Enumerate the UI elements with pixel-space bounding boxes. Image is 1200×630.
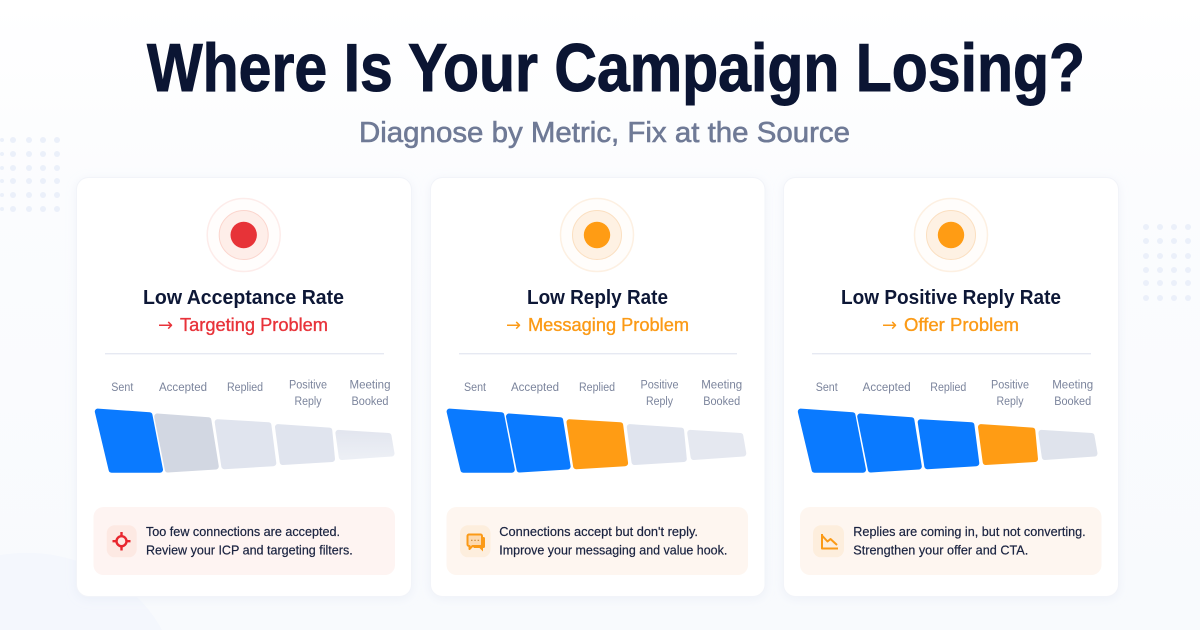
card heading: Low Positive Reply Rate xyxy=(841,287,1061,309)
funnel chart xyxy=(450,412,743,470)
diagnosis: targeting problem: → xyxy=(158,315,173,336)
callout text: Strengthen your offer and CTA. xyxy=(853,544,1028,558)
card heading: Low Acceptance Rate xyxy=(143,287,344,309)
funnel stage labels: Meeting xyxy=(350,380,390,392)
funnel stage labels: Accepted xyxy=(511,382,559,394)
callout: offer advice xyxy=(800,507,1102,575)
funnel stage labels: Positive xyxy=(640,380,678,392)
funnel stage labels: Reply xyxy=(646,396,673,408)
funnel stage labels: Replied xyxy=(930,382,966,394)
icon: chat bubbles xyxy=(460,525,490,557)
funnel stage labels: Replied xyxy=(227,382,263,394)
funnel stage labels: Positive xyxy=(289,380,327,392)
funnel stage labels: Meeting xyxy=(1052,380,1093,392)
funnel stage labels: Accepted xyxy=(159,382,207,394)
diagnosis: targeting problem: Targeting Problem xyxy=(180,315,328,335)
funnel stage labels xyxy=(816,380,1093,408)
funnel stage labels: Sent xyxy=(464,382,487,394)
callout text: Improve your messaging and value hook. xyxy=(499,544,727,558)
callout: targeting advice xyxy=(94,507,395,575)
funnel stage labels: Booked xyxy=(352,396,388,408)
funnel stage labels: Replied xyxy=(579,382,615,394)
funnel stage labels: Reply xyxy=(294,396,322,408)
funnel stage labels: Booked xyxy=(1054,396,1091,408)
icon: orange status dot xyxy=(560,198,634,272)
funnel stage labels: Meeting xyxy=(701,380,742,392)
funnel chart xyxy=(801,412,1094,470)
diagnosis: messaging problem: → xyxy=(506,315,521,336)
funnel stage labels: Sent xyxy=(816,382,838,394)
funnel chart xyxy=(98,412,392,470)
callout text xyxy=(499,525,727,558)
diagnosis: offer problem: → xyxy=(882,315,897,336)
subtitle: Diagnose by Metric, Fix at the Source xyxy=(359,117,850,149)
funnel stage labels: Sent xyxy=(111,382,134,394)
icon: orange status dot xyxy=(914,198,988,272)
icon: red status dot xyxy=(207,198,280,272)
title: Where Is Your Campaign Losing? xyxy=(147,30,1085,106)
panel: low acceptance rate xyxy=(76,178,412,596)
icon: target xyxy=(107,525,137,557)
callout: messaging advice xyxy=(446,507,748,575)
callout text: Connections accept but don't reply. xyxy=(499,525,698,539)
callout text xyxy=(853,525,1086,558)
callout text: Too few connections are accepted. xyxy=(146,525,340,539)
panel: low reply rate xyxy=(430,178,765,596)
funnel stage labels: Reply xyxy=(996,396,1024,408)
funnel stage labels xyxy=(111,380,391,408)
panel: low positive reply rate xyxy=(784,178,1118,596)
diagnosis: offer problem: Offer Problem xyxy=(904,315,1019,335)
funnel stage labels: Positive xyxy=(991,380,1029,392)
icon: declining chart xyxy=(813,525,844,557)
card heading: Low Reply Rate xyxy=(527,287,668,309)
callout text: Review your ICP and targeting filters. xyxy=(146,544,353,558)
callout text: Replies are coming in, but not converting. xyxy=(853,525,1086,539)
funnel stage labels xyxy=(464,380,742,408)
diagnosis: messaging problem: Messaging Problem xyxy=(528,315,689,335)
funnel stage labels: Booked xyxy=(703,396,740,408)
callout text xyxy=(146,525,353,558)
funnel stage labels: Accepted xyxy=(863,382,911,394)
